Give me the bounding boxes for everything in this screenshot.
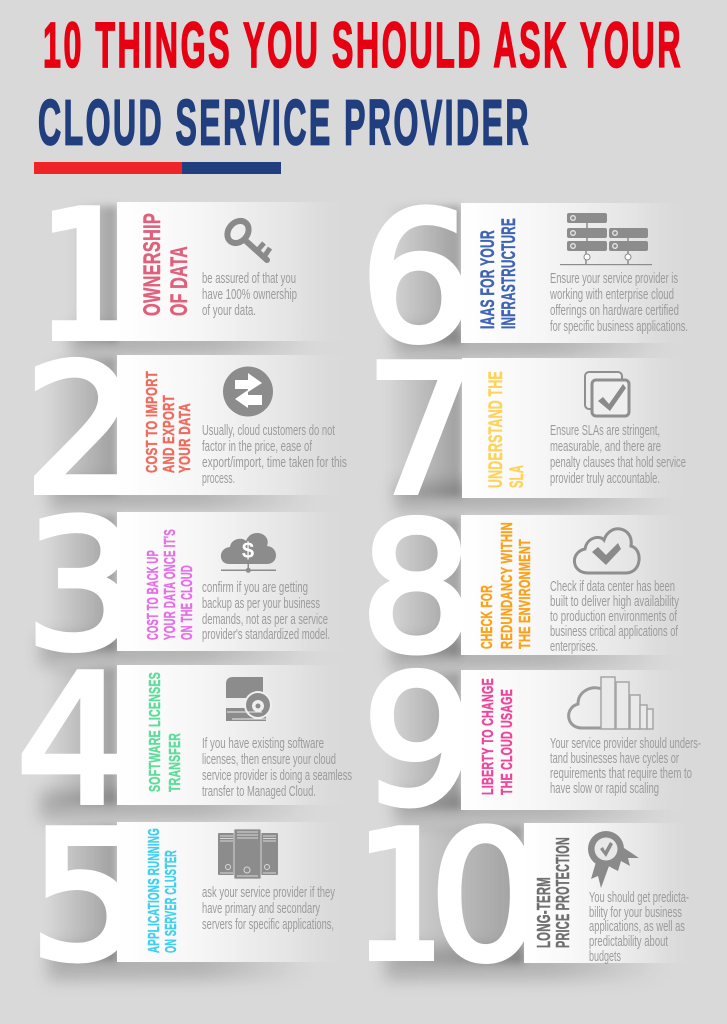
numeral 5: 5 [29, 793, 143, 1000]
heading: LONG-TERM [534, 877, 554, 948]
numeral 1: 1 [29, 173, 142, 380]
heading: SLA [507, 465, 528, 488]
heading: THE CLOUD USAGE [499, 689, 516, 795]
body text: confirm if you are getting [202, 579, 308, 596]
body text: have primary and secondary [202, 900, 320, 917]
icon: software disc [226, 677, 272, 721]
body text: If you have existing software [202, 735, 324, 752]
body text: measurable, and there are [550, 438, 661, 455]
heading: OWNERSHIP [139, 213, 166, 316]
icon: key [223, 217, 270, 260]
body text: process. [202, 470, 235, 487]
icon: exchange arrows [223, 366, 273, 416]
body text: ask your service provider if they [202, 884, 335, 901]
numeral 8: 8 [360, 485, 473, 692]
heading [144, 371, 194, 473]
heading [147, 672, 184, 792]
heading: REDUNDANCY WITHIN [499, 522, 516, 649]
heading: PRICE PROTECTION [553, 837, 573, 948]
numeral 7: 7 [365, 327, 478, 534]
heading: ON SERVER CLUSTER [163, 850, 180, 953]
heading: YOUR DATA ONCE IT'S [162, 529, 179, 640]
panel: item 6 iaas for your infrastructure [360, 174, 693, 382]
numeral 10 [369, 823, 524, 964]
heading: SOFTWARE LICENSES [147, 672, 164, 792]
panel: item 10 long-term price protection [369, 822, 688, 987]
body text: Ensure SLAs are stringent, [550, 422, 660, 439]
panel: item 2 cost to import and export [24, 327, 352, 534]
icon: server cluster [218, 829, 278, 879]
heading: APPLICATIONS RUNNING [146, 828, 163, 953]
body text [202, 884, 335, 933]
heading: THE ENVIRONMENT [517, 539, 534, 649]
body text: factor in the price, ease of [202, 438, 313, 455]
heading: IAAS FOR YOUR [478, 230, 499, 329]
body text: provider's standardized model. [202, 626, 330, 643]
panel: item 5 applications on server cluster [29, 793, 352, 1000]
heading: AND EXPORT [161, 395, 178, 473]
body text: transfer to Managed Cloud. [202, 783, 316, 800]
panel: item 3 cost to back up [25, 482, 352, 690]
body text [202, 270, 297, 319]
heading [139, 213, 193, 316]
heading [479, 522, 534, 649]
heading: OF DATA [166, 246, 193, 316]
body text: demands, not as per a service [202, 611, 328, 628]
title [38, 9, 683, 158]
heading [145, 529, 196, 640]
body text: Usually, cloud customers do not [202, 422, 336, 439]
icon: cloud with bars [569, 677, 653, 729]
heading: UNDERSTAND THE [486, 371, 507, 488]
panel: item 4 software licenses transfer [16, 637, 352, 844]
heading [478, 218, 520, 329]
body text: backup as per your business [202, 595, 320, 612]
panel: item 1 ownership of data [52, 202, 302, 362]
icon: cloud with dollar: $ [242, 538, 254, 563]
heading [534, 837, 573, 948]
body text: licenses, then ensure your cloud [202, 751, 336, 768]
body text: provider truly accountable. [550, 470, 660, 487]
body text: predictability about [589, 933, 669, 950]
panel: item 8 check for redundancy [360, 485, 693, 692]
numeral 2: 2 [24, 327, 137, 534]
body text [550, 735, 701, 797]
body text [589, 889, 689, 965]
heading [486, 371, 528, 488]
body text: enterprises. [550, 638, 598, 655]
body text: service provider is doing a seamless [202, 767, 352, 784]
body text: be assured of that you [202, 270, 296, 287]
body text [550, 422, 686, 487]
panel: item 7 understand the sla [365, 327, 693, 534]
numeral 4: 4 [16, 637, 129, 844]
body text: have slow or rapid scaling [550, 780, 659, 797]
numeral 6: 6 [360, 174, 473, 382]
body text [202, 735, 352, 800]
heading: LIBERTY TO CHANGE [480, 678, 497, 795]
heading: TRANSFER [167, 733, 184, 792]
heading: COST TO BACK UP [145, 550, 162, 640]
body text: have 100% ownership [202, 286, 297, 303]
icon: cloud with check [574, 529, 639, 573]
numeral 10: 1 [348, 793, 461, 1000]
body text: export/import, time taken for this [202, 454, 347, 471]
body text: servers for specific applications, [202, 916, 334, 933]
numeral 10: 0 [429, 794, 542, 1000]
numeral 9: 9 [362, 638, 475, 845]
body text: budgets [589, 948, 621, 965]
heading: YOUR DATA [177, 403, 194, 473]
icon: server stacks [560, 213, 652, 265]
heading: COST TO IMPORT [144, 371, 161, 473]
heading: INFRASTRUCTURE [499, 218, 520, 329]
icon: cloud with dollar [221, 533, 276, 573]
heading: CHECK FOR [479, 585, 496, 649]
icon: award rosette [588, 831, 639, 888]
body text [549, 270, 688, 335]
title underline bar [34, 162, 281, 174]
body text: of your data. [202, 302, 256, 319]
body text [202, 579, 330, 643]
heading [146, 828, 180, 953]
heading [480, 678, 516, 795]
icon: checked documents [585, 372, 629, 416]
numeral 3: 3 [25, 482, 138, 690]
body text [550, 578, 679, 655]
panel: item 9 liberty to change [362, 638, 701, 845]
body text [202, 422, 347, 487]
heading: ON THE CLOUD [179, 565, 196, 640]
